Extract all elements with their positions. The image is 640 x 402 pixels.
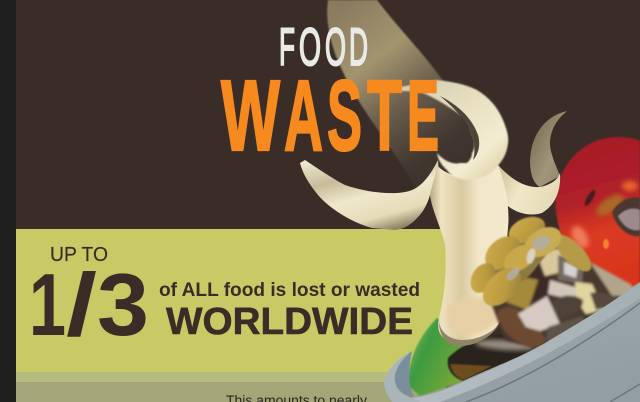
number: 1/3: 1	[29, 255, 66, 354]
icon: green fruit in bowl	[408, 318, 480, 396]
dark horn stem	[530, 111, 567, 187]
title: WASTE: W	[221, 60, 280, 172]
text: WORLDWIDE: WORLDWIDE	[166, 301, 413, 343]
icon: yellow mushroom caps	[465, 212, 597, 313]
icon: tomato	[555, 137, 640, 296]
number: 1/3	[29, 255, 149, 354]
left margin strip	[0, 0, 16, 402]
title: WASTE: T	[367, 60, 402, 172]
left arm of peel	[300, 160, 440, 230]
text: UP TO: UP TO	[50, 243, 108, 266]
number: 1/3: /	[66, 255, 97, 354]
right arm of peel	[495, 165, 560, 214]
icon: mushrooms and scraps	[490, 246, 632, 350]
title: WASTE	[221, 60, 439, 172]
title: FOOD: O	[325, 18, 346, 77]
top curl of peel	[392, 80, 508, 180]
title: WASTE: S	[327, 60, 362, 172]
infographic canvas: D	[349, 18, 368, 77]
bottom shadow of stem	[439, 322, 498, 346]
title: FOOD: F	[279, 18, 295, 77]
infographic canvas: E	[407, 60, 439, 172]
text: of ALL food is lost or wasted: of ALL food is lost or wasted	[159, 279, 420, 301]
title: WASTE: A	[284, 60, 323, 172]
pale bottom shine	[447, 296, 498, 336]
dark inner curl highlight	[440, 96, 479, 160]
icon: grey bowl	[384, 282, 640, 402]
title: FOOD: O	[299, 18, 321, 77]
icon: banana peel	[300, 80, 567, 346]
icon: translucent banana peel shadow	[327, 0, 480, 192]
panel: green statistic band	[16, 229, 446, 402]
title: FOOD	[279, 18, 368, 77]
number: 1/3: 3	[97, 255, 149, 354]
main stem of peel	[430, 165, 509, 341]
icon: dark food in bowl	[448, 333, 560, 381]
